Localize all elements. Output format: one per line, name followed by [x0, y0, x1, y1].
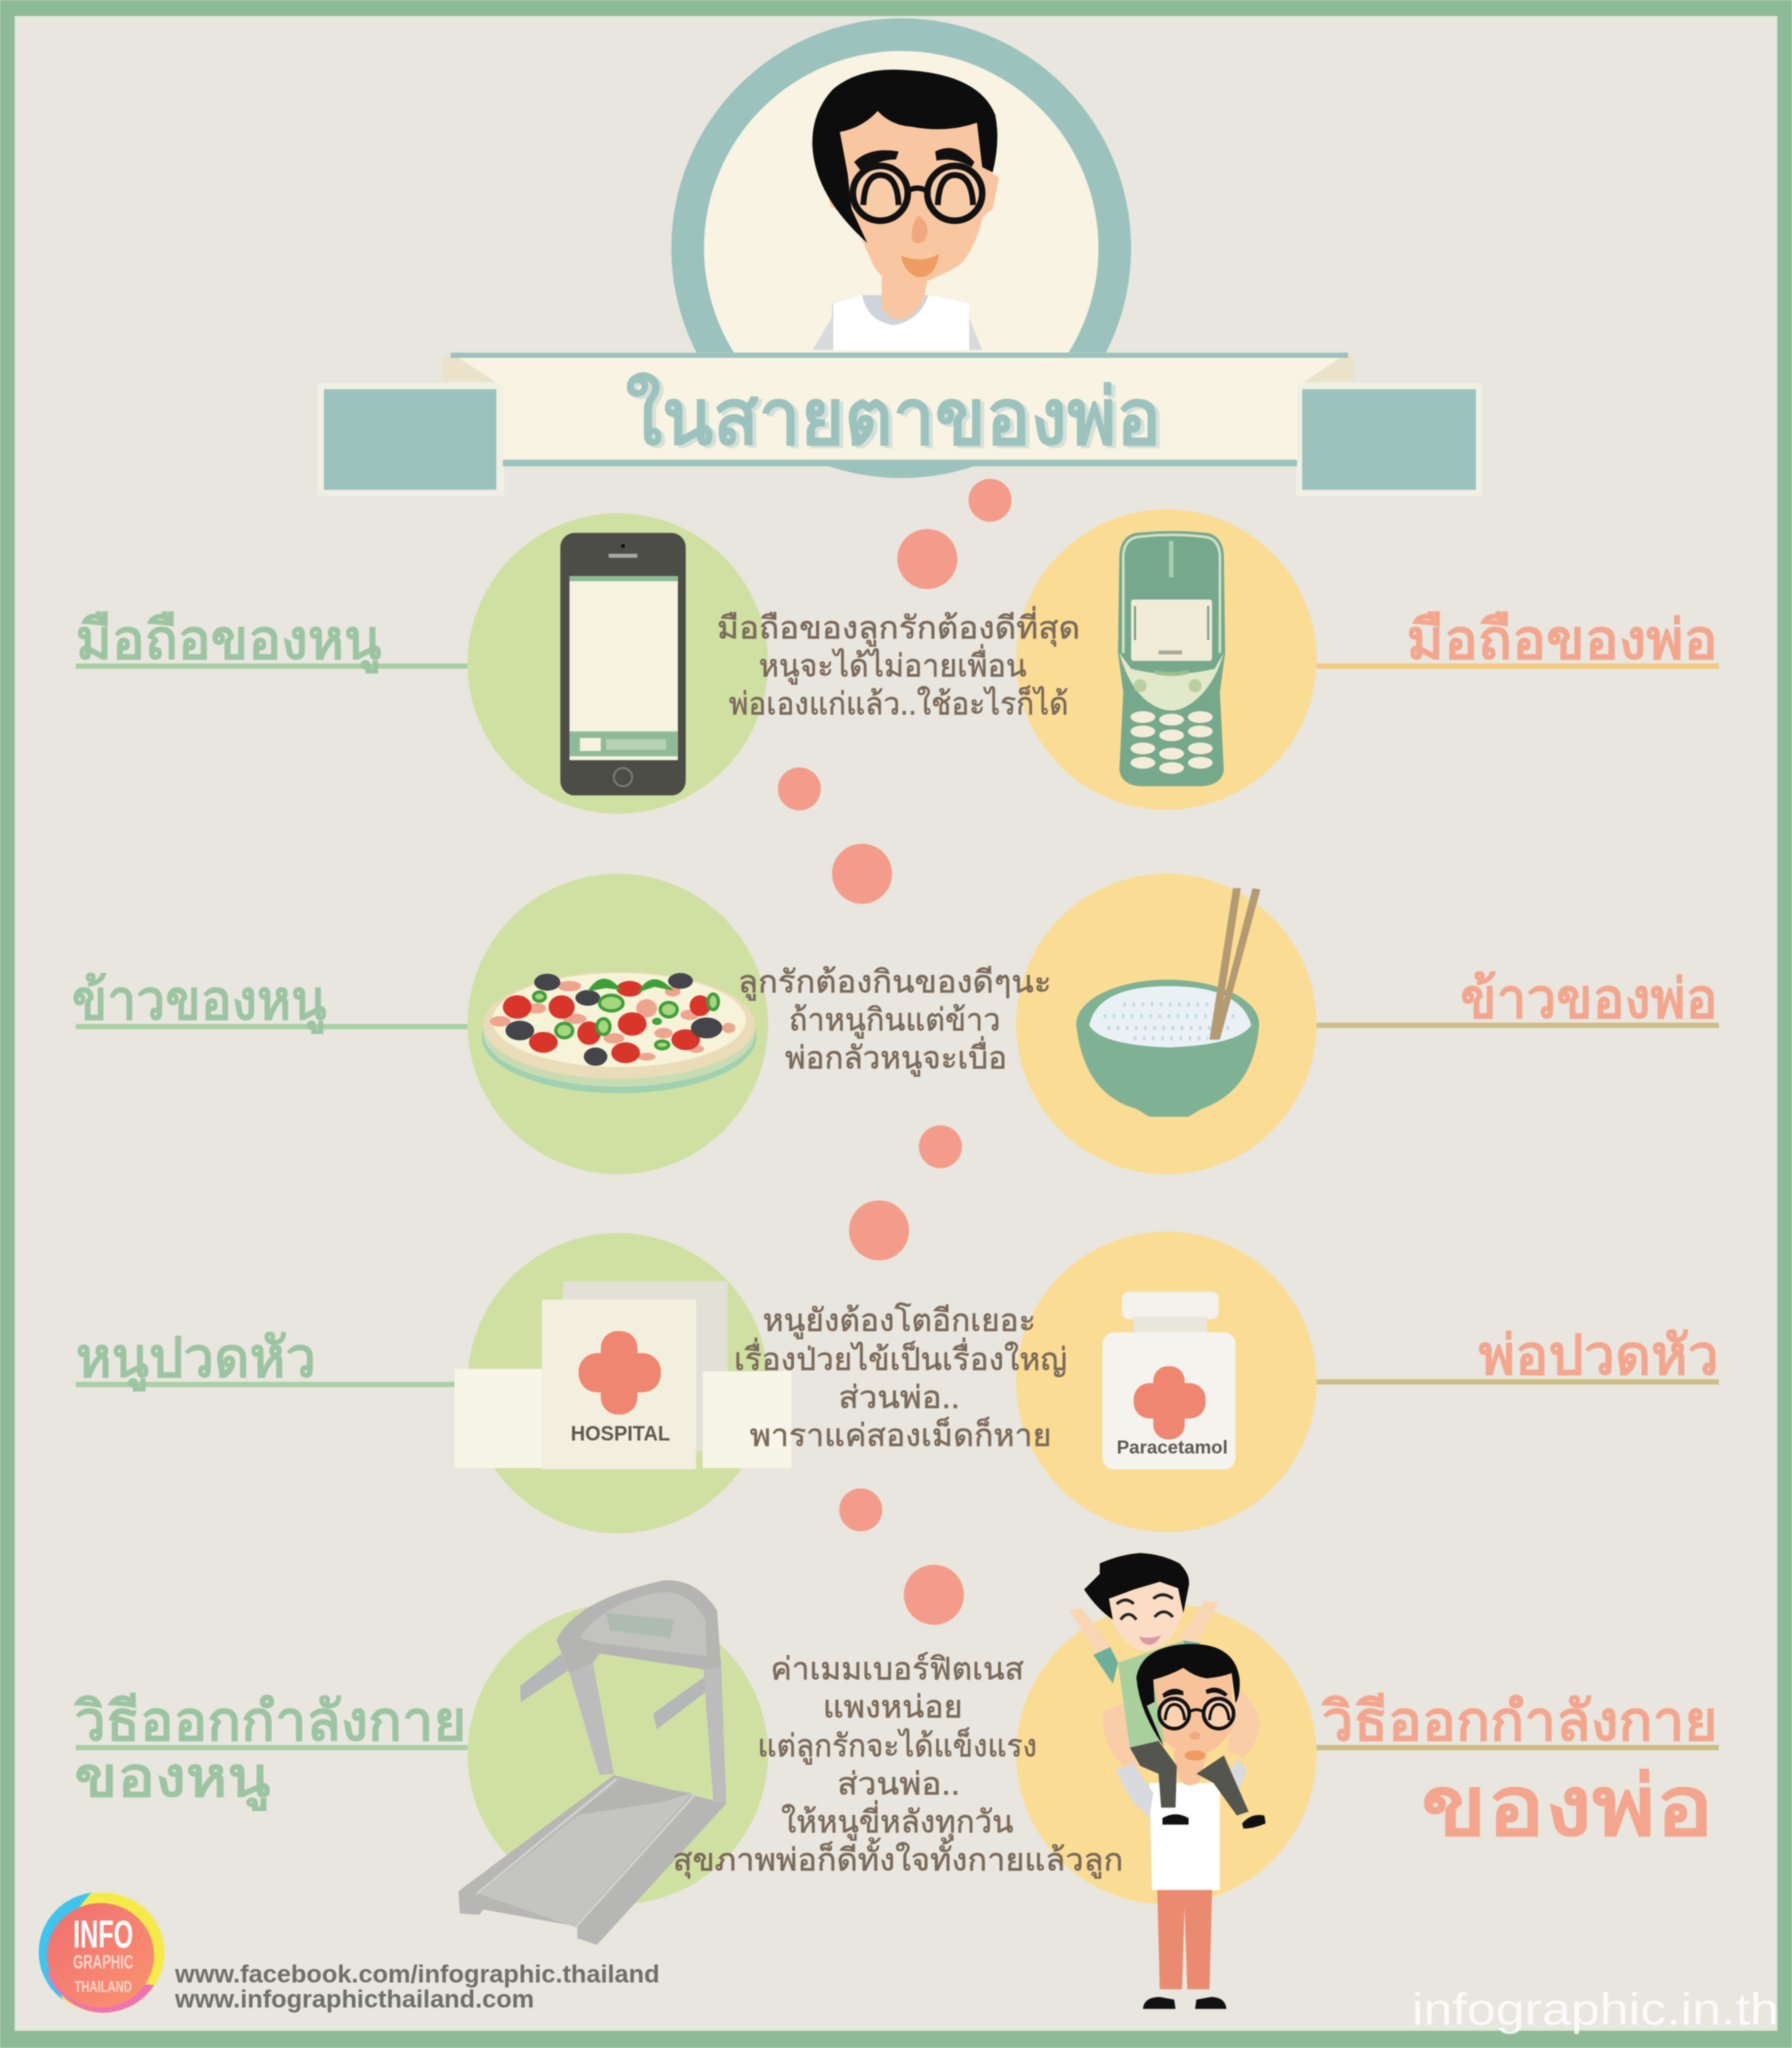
bottle label: Paracetamol — [1117, 1437, 1228, 1458]
caption: illness: เรื่องป่วยไข้เป็นเรื่องใหญ่ — [734, 1337, 1067, 1377]
label: child's exercise: ของหนู — [74, 1746, 270, 1811]
label: child's exercise — [73, 1690, 466, 1811]
caption: phones — [717, 606, 1080, 721]
row 2 left circle — [468, 874, 768, 1174]
label: father's exercise — [1321, 1690, 1718, 1853]
logo: Infographic Thailand: THAILAND — [74, 1979, 132, 1996]
caption: phones: พ่อเองแก่แล้ว..ใช้อะไรก็ได้ — [729, 684, 1068, 721]
hospital label: HOSPITAL — [571, 1423, 670, 1446]
label: father's exercise: วิธีออกกำลังกาย — [1321, 1690, 1718, 1752]
row 3 right circle — [1016, 1232, 1317, 1532]
father head small — [1136, 1644, 1240, 1761]
logo: Infographic Thailand — [39, 1893, 165, 2013]
website links: www.infographicthailand.com — [174, 1987, 534, 2014]
caption: exercise: ให้หนูขี่หลังทุกวัน — [781, 1799, 1014, 1841]
connector lines — [76, 664, 1719, 1750]
caption: exercise: สุขภาพพ่อก็ดีทั้งใจทั้งกายแล้วลูก — [673, 1836, 1123, 1879]
icon: smartphone — [560, 533, 686, 795]
row 2 right circle — [1016, 874, 1317, 1174]
caption: exercise: แต่ลูกรักจะได้แข็งแรง — [758, 1727, 1037, 1765]
child head — [1084, 1553, 1189, 1650]
icon: medicine bottle — [1102, 1292, 1236, 1469]
label: child's headache: หนูปวดหัว — [76, 1327, 316, 1392]
website links — [174, 1962, 660, 2014]
caption: illness — [734, 1302, 1067, 1453]
caption: food — [738, 965, 1051, 1076]
left upright — [569, 1663, 614, 1775]
label: father's phone: มือถือของพ่อ — [1407, 608, 1718, 670]
father shoes — [1143, 1997, 1226, 2009]
caption: exercise: ส่วนพ่อ.. — [837, 1767, 960, 1802]
label: child's phone: มือถือของหนู — [76, 608, 381, 673]
icon: pizza — [482, 972, 756, 1093]
row 4 left circle — [468, 1604, 768, 1904]
icon: rice bowl with chopsticks — [1076, 888, 1260, 1117]
watermark: infographic.in.th — [1412, 1985, 1779, 2034]
title ribbon: ในสายตาของพ่อ — [630, 374, 1165, 464]
caption: illness: ส่วนพ่อ.. — [839, 1380, 960, 1415]
console arch — [556, 1580, 721, 1673]
child legs — [1130, 1741, 1249, 1816]
child arms — [1070, 1601, 1219, 1659]
label: child's rice: ข้าวของหนู — [72, 969, 327, 1034]
side handles — [520, 1654, 713, 1729]
figure: father carrying child — [1070, 1553, 1266, 2009]
icon: old keypad phone — [1118, 531, 1225, 786]
website links: www.facebook.com/infographic.thailand — [174, 1962, 660, 1989]
logo: Infographic Thailand: GRAPHIC — [73, 1951, 133, 1973]
console screen — [606, 1613, 674, 1638]
decorative salmon dots — [778, 479, 1012, 1625]
title ribbon — [317, 353, 1482, 496]
row 1 left circle — [468, 513, 768, 814]
row 4 right circle — [1016, 1604, 1317, 1904]
father arms — [1103, 1690, 1260, 1766]
father trousers — [1157, 1890, 1212, 1989]
father shirt — [1149, 1783, 1220, 1890]
icon: hospital — [455, 1281, 792, 1469]
caption: exercise: ค่าเมมเบอร์ฟิตเนส — [771, 1652, 1024, 1687]
title: ในสายตาของพ่อ — [626, 371, 1161, 461]
child shoes — [1162, 1814, 1266, 1829]
icon: treadmill — [458, 1580, 726, 1945]
caption: illness: หนูยังต้องโตอีกเยอะ — [763, 1302, 1036, 1339]
logo: Infographic Thailand: INFO — [73, 1913, 133, 1956]
row 1 right circle — [1016, 509, 1317, 810]
label: father's headache: พ่อปวดหัว — [1479, 1324, 1719, 1386]
father neck — [1173, 1750, 1208, 1785]
caption: illness: พาราแค่สองเม็ดก็หาย — [750, 1416, 1051, 1453]
row 3 left circle — [468, 1233, 768, 1533]
right upright — [703, 1659, 726, 1804]
caption: food: ลูกรักต้องกินของดีๆนะ — [738, 965, 1051, 1001]
father shirt — [812, 295, 982, 350]
portrait medallion: father — [671, 18, 1131, 478]
belt — [479, 1782, 692, 1927]
caption: exercise — [673, 1652, 1123, 1879]
caption: food: พ่อกลัวหนูจะเบื่อ — [785, 1035, 1007, 1076]
deck — [458, 1775, 726, 1945]
caption: phones: หนูจะได้ไม่อายเพื่อน — [759, 644, 1027, 685]
child shirt — [1118, 1640, 1195, 1748]
caption: food: ถ้าหนูกินแต่ข้าว — [789, 1003, 1000, 1039]
label: father's exercise: ของพ่อ — [1421, 1759, 1714, 1853]
father head — [812, 70, 999, 320]
caption: phones: มือถือของลูกรักต้องดีที่สุด — [717, 606, 1080, 648]
caption: exercise: แพงหน่อย — [823, 1690, 963, 1725]
label: father's rice: ข้าวของพ่อ — [1460, 967, 1718, 1029]
label: child's exercise: วิธีออกกำลังกาย — [73, 1690, 466, 1752]
